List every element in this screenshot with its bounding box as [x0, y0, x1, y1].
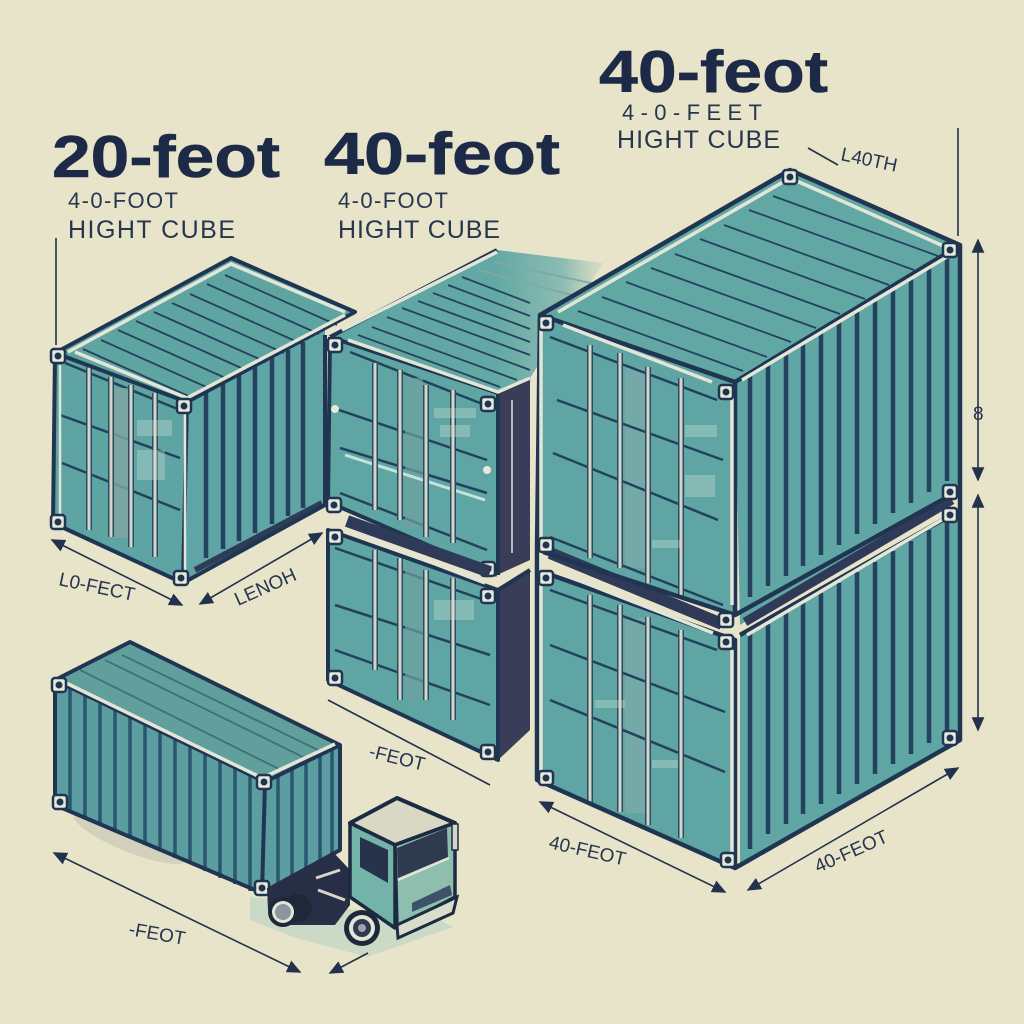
- container: 40-foot stack: [327, 250, 603, 760]
- dimension: 40-foot width: -FEOT: [367, 741, 428, 776]
- title: 40-foot: 40-feot: [324, 121, 560, 187]
- truck shadow: [250, 897, 453, 957]
- outlines and corner castings: [537, 170, 960, 868]
- dimension: 20-foot width: L0-FECT: [57, 569, 137, 606]
- title: 20-foot: 20-feot: [52, 124, 280, 190]
- subtitle: 40-foot high cube: 4-0-FEET: [622, 100, 762, 125]
- dimension: high cube height: 8: [973, 404, 984, 425]
- container: 20-foot: [51, 258, 355, 585]
- title: 40-foot high cube: 40-feot: [599, 39, 828, 105]
- top face: [540, 170, 960, 382]
- dimension: top length: L40TH: [839, 144, 899, 177]
- lower 40-foot container: [328, 521, 530, 760]
- upper 40-foot container: [327, 250, 603, 576]
- dimension: top length: [808, 144, 899, 177]
- dimension: 20-foot height line: [55, 238, 57, 345]
- dimension: high cube length: 40-FEOT: [811, 826, 892, 878]
- subtitle: 40-foot column: 4-0-FOOT: [338, 188, 448, 213]
- container: 40-foot high cube stack: [537, 170, 960, 868]
- dimension: truck width line: [330, 953, 368, 973]
- dimension: 40-foot width: [328, 700, 490, 785]
- upper front doors: [537, 315, 735, 615]
- dimension: 20-foot length: LENOH: [231, 565, 300, 611]
- truck wheels: [268, 894, 380, 946]
- lower right side: [740, 500, 960, 868]
- dimension: high cube length: [748, 768, 958, 890]
- subtitle: 20-foot column: 4-0-FOOT: [68, 188, 178, 213]
- dimension: trailer length: [54, 853, 300, 972]
- dimension: high cube width: [540, 802, 725, 892]
- heading: 40-foot high cube column: [599, 39, 828, 154]
- subtitle: 40-foot high cube: HIGHT CUBE: [617, 126, 780, 154]
- truck cab: [267, 798, 458, 946]
- trailer ground shadow: [69, 803, 191, 873]
- heading: 40-foot column: [324, 121, 560, 244]
- upper right side: [735, 245, 960, 625]
- heading: 20-foot column: [52, 124, 280, 244]
- dimension: high cube width: 40-FEOT: [547, 832, 628, 871]
- lower front doors: [537, 553, 735, 868]
- dimension: 20-foot width: [52, 540, 182, 606]
- subtitle: 40-foot column: HIGHT CUBE: [338, 216, 500, 244]
- dimension: 20-foot length: [200, 533, 322, 611]
- subtitle: 20-foot column: HIGHT CUBE: [68, 216, 235, 244]
- dimension: trailer length: -FEOT: [127, 919, 187, 950]
- truck trailer container: [52, 642, 340, 895]
